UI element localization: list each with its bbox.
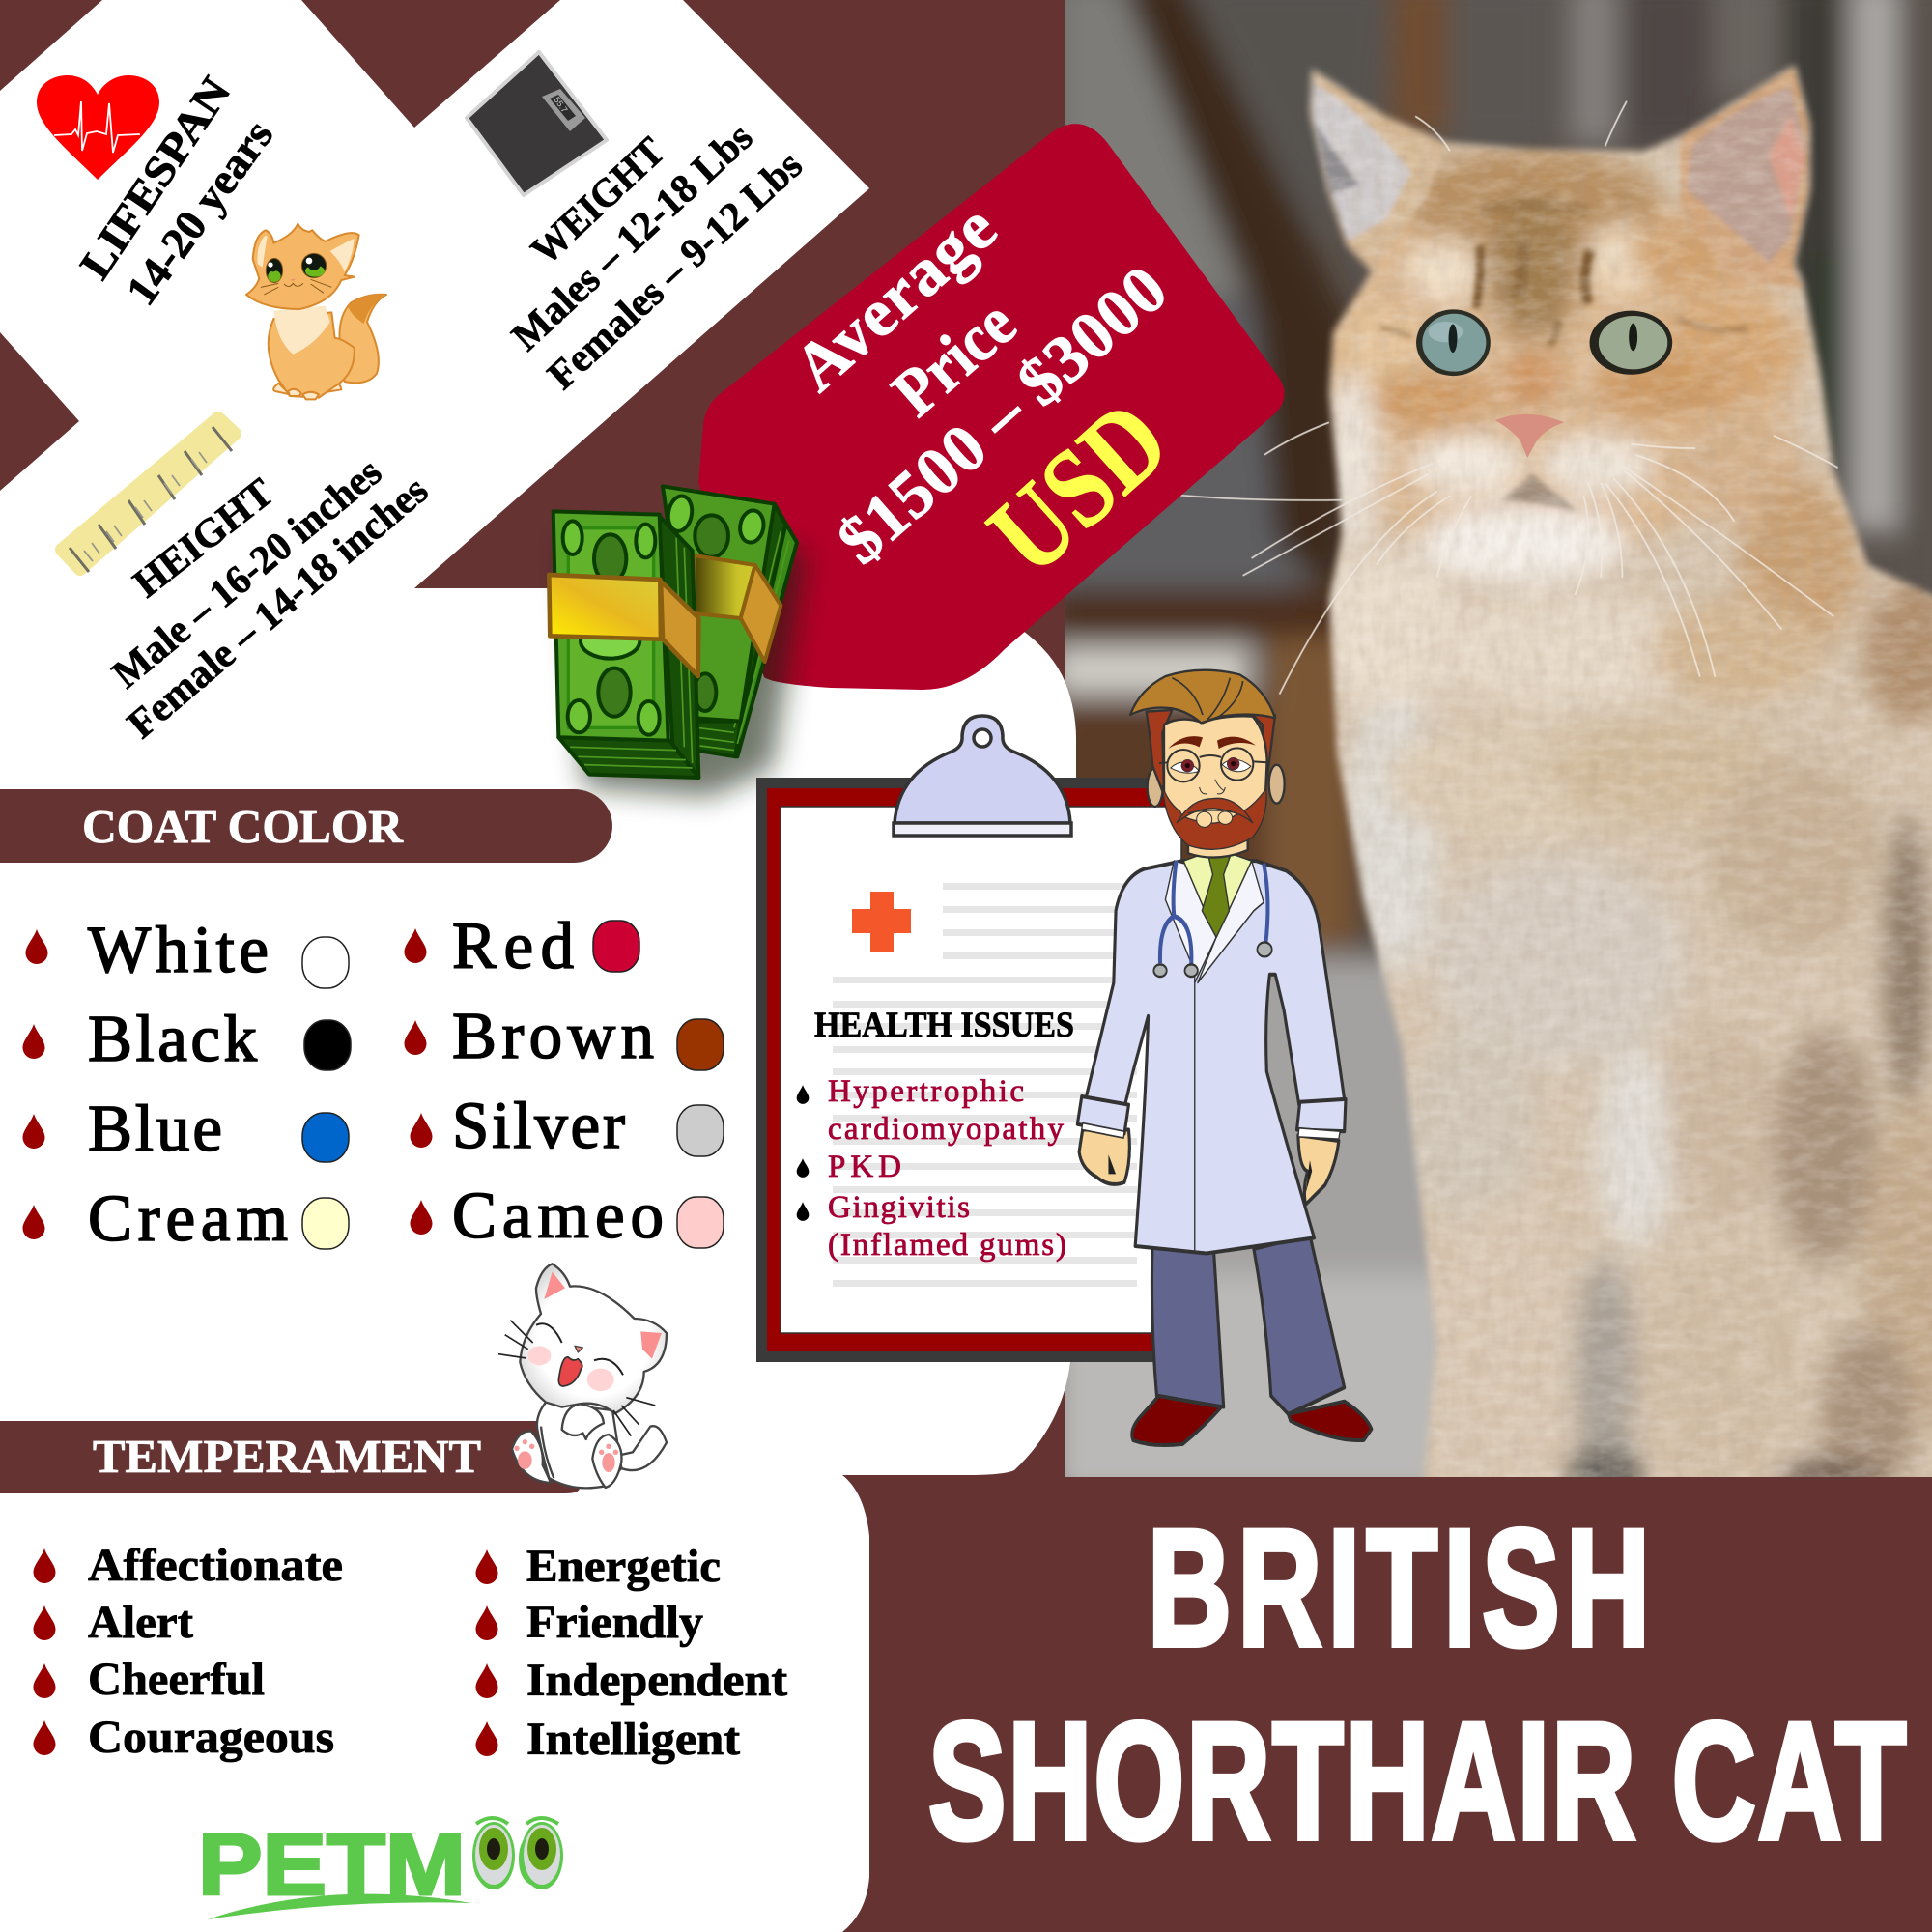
health issues heading: HEALTH ISSUES [814,1006,1074,1045]
eyes [1171,762,1200,773]
front stack [554,511,698,778]
title [928,1496,1906,1874]
clipboard [756,716,1181,1362]
temperament traits [88,1540,787,1765]
price text [781,190,1192,598]
price text: $1500 – $3000 [824,252,1181,579]
weight block [467,52,811,398]
height text: Female – 14-18 inches [120,469,437,748]
temperament section [0,1421,787,1765]
height text: Male – 16-20 inches [104,450,390,697]
shoes [1132,1396,1372,1445]
temperament traits: Friendly [526,1597,703,1648]
title: SHORTHAIR CAT [928,1690,1906,1874]
colour names: Black [88,1002,257,1075]
temperament bullets [33,1548,498,1756]
cat photo [1053,0,1932,1507]
white content panels [0,0,1076,1932]
health issues list: Hypertrophic [828,1074,1024,1109]
clipboard board [756,778,1181,1362]
brows [1168,736,1203,749]
temperament traits: Energetic [526,1541,721,1592]
lifespan text: 14-20 years [117,111,282,314]
colour names: Brown [452,999,654,1072]
weight text: Females – 9-12 Lbs [540,143,811,398]
heading bar: coat color: COAT COLOR [82,800,404,853]
health issues list: Gingivitis [828,1190,970,1225]
cat ears [1310,65,1810,511]
colour swatches [302,921,724,1249]
logo: Petmoo [198,1816,563,1919]
face [1164,716,1267,847]
money shadow [565,541,807,797]
height text: HEIGHT [126,470,282,607]
icon: white laughing kitten [498,1264,667,1488]
lifespan block [37,69,282,314]
doctor body [1077,848,1372,1445]
icon: clip [894,716,1071,836]
temperament traits: Cheerful [88,1654,265,1705]
ears [1148,765,1285,807]
colour names: Red [452,909,574,982]
side hair [1147,710,1172,795]
colour bullets [23,928,433,1239]
price text: Average [781,190,1010,406]
hands [1079,1129,1339,1205]
back strap [694,555,781,662]
cat mouth [1501,474,1577,511]
colour names: White [88,913,269,986]
heading bar: coat color [0,789,612,863]
fur texture [1314,85,1872,1477]
lifespan text [71,69,282,314]
health issues list [828,1074,1066,1263]
icon: orange kitten [246,224,386,399]
colour names: Cream [88,1181,288,1255]
temperament traits: Affectionate [88,1540,343,1591]
glasses [1159,748,1268,781]
colour names: Cameo [452,1179,664,1252]
icon: bathroom scale [467,52,607,195]
icon: ruler [62,418,235,572]
icon: money stacks [549,486,807,797]
nose [1200,780,1225,794]
hair [1130,670,1275,723]
list bullets [797,1085,809,1221]
doctor head [1130,670,1285,858]
temperament traits: Intelligent [526,1714,740,1765]
cat eyes and nose [1416,309,1672,458]
logo eyes [472,1818,563,1889]
cat whiskers [1109,101,1838,695]
colour names: Blue [88,1092,222,1165]
lifespan text: LIFESPAN [71,69,240,288]
neck [1188,838,1248,858]
front strap [549,575,698,676]
cat body fur tones [1347,680,1932,1504]
price text: USD [965,376,1192,598]
weight text: Males – 12-18 Lbs [503,115,761,359]
coat color section [0,789,724,1255]
price text: Price [879,286,1030,431]
icon: heart with pulse [37,75,159,180]
cat [1304,62,1932,1477]
coat cuffs [1077,1096,1346,1133]
health issues list: cardiomyopathy [828,1112,1065,1147]
temperament traits: Independent [526,1655,787,1706]
heading bar: temperament [0,1421,580,1493]
doctor character [1077,670,1372,1445]
weight text: WEIGHT [523,129,673,273]
height block [62,418,437,748]
logo: Petmoo: PETM [198,1817,466,1914]
beard [1162,785,1266,849]
health issues list: (Inflamed gums) [828,1228,1066,1263]
cat head fur tones [1264,147,1932,724]
form lines [833,883,1141,1287]
health issues list: PKD [828,1150,901,1184]
heading bar: temperament: TEMPERAMENT [93,1430,481,1483]
collar and shirt [1165,848,1264,1252]
title: BRITISH [1148,1496,1650,1681]
back stack [663,486,797,756]
price tag [698,124,1285,690]
lab coat [1086,861,1345,1253]
colour names: Silver [452,1089,625,1162]
colour names [88,909,664,1255]
trousers [1151,1236,1345,1414]
cat face markings [1380,205,1747,345]
temperament traits: Courageous [88,1712,334,1763]
icon: medical cross [852,892,911,952]
logo: Petmoo: OO [470,1816,562,1902]
stethoscope [1160,861,1267,966]
temperament traits: Alert [88,1597,193,1648]
icon: bathroom scale: 55.7 [552,95,570,115]
